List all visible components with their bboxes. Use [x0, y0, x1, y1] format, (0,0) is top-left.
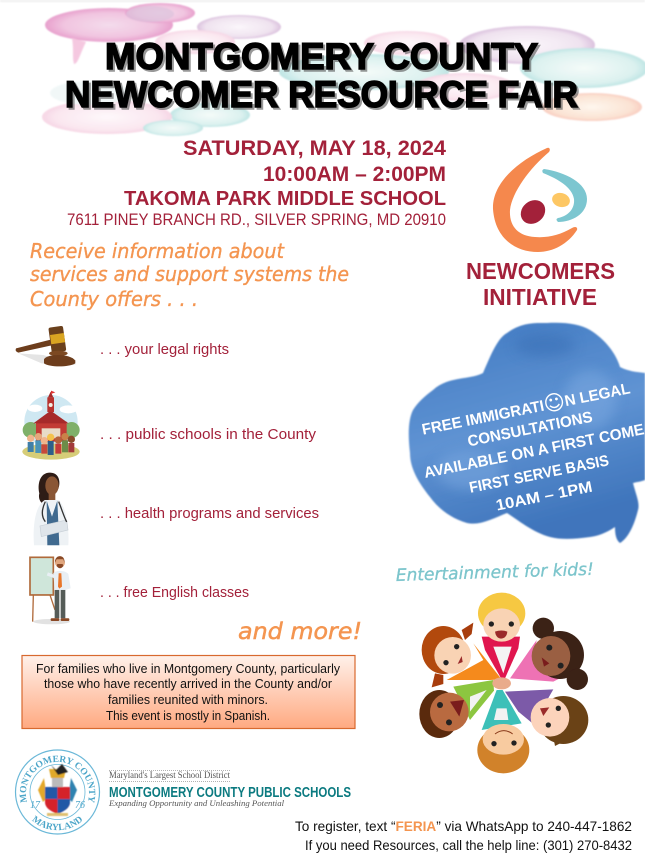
- cloud shape: [409, 323, 645, 543]
- watercolor bubbles banner: [0, 0, 645, 136]
- intro text: [30, 239, 349, 311]
- kid: bottom, orange hair: [477, 724, 529, 773]
- list item: legal rights: . . . your legal rights: [100, 341, 229, 358]
- cloud watercolor highlights: [436, 333, 616, 490]
- cloud line 3: AVAILABLE ON A FIRST COME: [423, 421, 645, 482]
- info line 3: families reunited with minors.: [108, 693, 268, 707]
- venue: TAKOMA PARK MIDDLE SCHOOL: [124, 188, 446, 210]
- intro line 3: County offers . . .: [30, 287, 198, 311]
- seal year left: 17: [30, 800, 41, 811]
- logo wordmark line 1: NEWCOMERS: [466, 258, 615, 284]
- info line 2: those who have recently arrived in the County and/or: [44, 677, 332, 691]
- cloud line 1: N LEGAL: [563, 380, 632, 410]
- logo yellow dot: [550, 191, 572, 209]
- cloud line 1: FREE IMMIGRATI: [421, 397, 549, 439]
- registration info: [295, 818, 632, 853]
- dotted rule top: [109, 770, 230, 772]
- entertainment heading: Entertainment for kids!: [396, 560, 594, 586]
- MCPS name: MONTGOMERY COUNTY PUBLIC SCHOOLS: [109, 785, 351, 801]
- cloud line 2: CONSULTATIONS: [466, 409, 594, 450]
- address: 7611 PINEY BRANCH RD., SILVER SPRING, MD 20910: [67, 210, 446, 229]
- info box: [22, 656, 355, 728]
- info line 1: For families who live in Montgomery County, particularly: [36, 662, 341, 676]
- speech cloud callout: [409, 323, 645, 543]
- logo orange swoosh: [493, 148, 577, 252]
- kid: upper left, red pigtails: [422, 623, 473, 687]
- info box text: [36, 662, 341, 723]
- icon: schoolhouse with children: [22, 391, 80, 460]
- title line 2 shadow: NEWCOMER RESOURCE FAIR: [67, 76, 580, 117]
- seal bottom lettering: MARYLAND: [32, 815, 82, 830]
- list item: health: . . . health programs and services: [100, 505, 319, 522]
- event details: [67, 137, 446, 229]
- MCPS wordmark: [108, 770, 351, 808]
- cloud line 5: 10AM – 1PM: [494, 479, 594, 515]
- tagline district: Maryland's Largest School District: [109, 770, 230, 780]
- list item: English classes: . . . free English classes: [100, 584, 249, 601]
- services list: [100, 341, 319, 601]
- children shirts and arms: [447, 637, 563, 730]
- seal year right: 76: [75, 800, 85, 811]
- register line: To register, text “FERIA” via WhatsApp to 240-447-1862: [295, 818, 632, 834]
- logo red dot: [516, 195, 550, 229]
- cloud line 4: FIRST SERVE BASIS: [468, 452, 610, 497]
- seal crest: [38, 764, 77, 816]
- and more: and more!: [238, 619, 362, 645]
- Newcomers Initiative logo: [466, 148, 615, 310]
- time: 10:00AM – 2:00PM: [263, 163, 446, 186]
- title line 2: NEWCOMER RESOURCE FAIR: [65, 74, 578, 115]
- cloud line 1: ☺: [541, 389, 567, 417]
- icon: doctor: [34, 473, 69, 545]
- title: [65, 36, 580, 117]
- logo teal arc: [542, 169, 587, 222]
- icon: gavel: [16, 326, 77, 366]
- info box background: [22, 656, 355, 728]
- intro line 1: Receive information about: [30, 239, 285, 263]
- kid: top, blond: [478, 593, 525, 642]
- kid: lower left, dark curly hair: [419, 690, 469, 738]
- info line 4: This event is mostly in Spanish.: [106, 709, 270, 723]
- kid: lower right, brown hair: [531, 696, 588, 746]
- seal outer ring: [16, 750, 100, 834]
- list item: public schools: . . . public schools in the County: [100, 426, 317, 443]
- MCPS slogan: Expanding Opportunity and Unleashing Potential: [108, 798, 285, 808]
- intro line 2: services and support systems the: [30, 262, 349, 286]
- icon: teacher at board: [30, 556, 71, 624]
- Montgomery County seal: [14, 749, 100, 835]
- dotted rule bottom: [109, 780, 230, 782]
- title line 1 shadow: MONTGOMERY COUNTY: [107, 38, 540, 79]
- logo wordmark line 2: INITIATIVE: [483, 284, 597, 310]
- title line 1: MONTGOMERY COUNTY: [105, 36, 538, 77]
- seal top lettering: MONTGOMERY COUNTY: [20, 756, 96, 803]
- date: SATURDAY, MAY 18, 2024: [183, 137, 446, 160]
- seal inner ring: [30, 764, 85, 820]
- kid: upper right, curly hair: [532, 618, 588, 690]
- cloud text: [420, 376, 645, 515]
- illustration: circle of children: [419, 593, 588, 773]
